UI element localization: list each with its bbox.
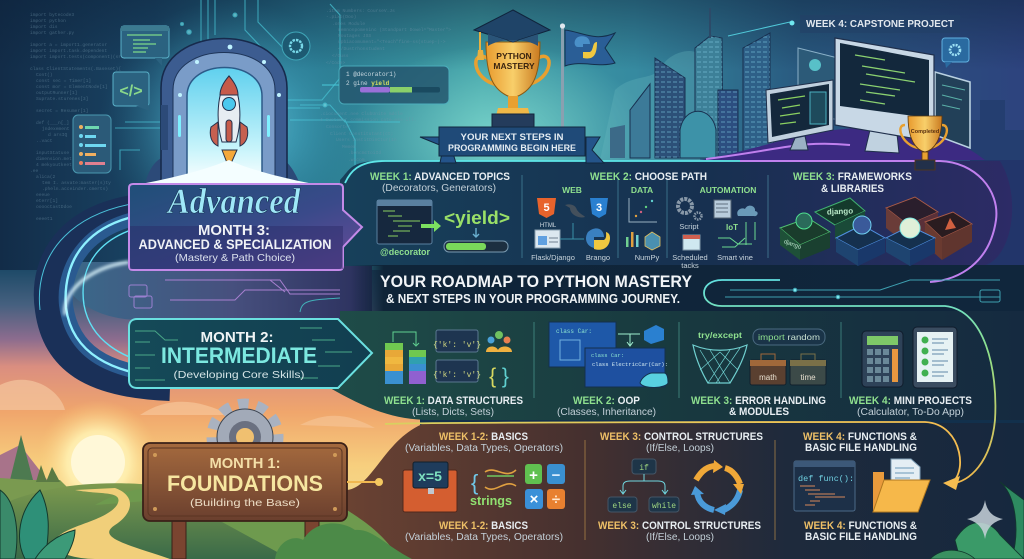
- banner: next steps: [420, 127, 604, 163]
- left code editor background: alica(2: [36, 174, 56, 180]
- section: month 1 week 3: WEEK 3: CONTROL STRUCTURES: [600, 431, 763, 443]
- section: month 3 week 1: @decorator: [380, 247, 430, 257]
- heading: month 1 signpost: (Building the Base): [190, 497, 300, 509]
- icon: braces flow: [471, 470, 516, 495]
- section: month 3 week 2: tacks: [681, 261, 699, 270]
- heading: capstone label: WEEK 4: CAPSTONE PROJECT: [806, 18, 955, 30]
- right code background: memnonpomeninc (Standpart Dowel^"Master">: [338, 27, 451, 33]
- section: month 2 week 4: WEEK 4: MINI PROJECTS: [849, 395, 972, 407]
- right code background: [320, 8, 451, 163]
- icon: green django box: [780, 213, 830, 260]
- icon: trophy and cap: MASTERY: [493, 61, 535, 71]
- left code editor background: jndexement: [42, 126, 70, 132]
- middle area behind tube: [60, 262, 372, 320]
- icon: class diagram: class Car:: [556, 328, 592, 335]
- icon: net: [693, 345, 747, 383]
- heading: month 2 sign: (Developing Core Skills): [174, 369, 304, 381]
- left code editor background: import dis: [30, 24, 58, 30]
- capstone leader line: [728, 20, 794, 36]
- icon: document: [714, 200, 731, 218]
- icon: left monitor: [766, 80, 833, 150]
- icon: trophy and cap: [474, 10, 550, 127]
- background: top tech sky: [0, 0, 1024, 320]
- city skyline: [600, 8, 1024, 160]
- bush: [275, 523, 412, 559]
- section: month 1 week 4: WEEK 4: FUNCTIONS &: [804, 520, 917, 532]
- left code editor background: ooooctastDdoe: [36, 204, 72, 210]
- icon: people: [486, 331, 512, 352]
- icon: if/else flow: while: [652, 502, 676, 511]
- section: month 1 week 3: [598, 431, 763, 543]
- icon: times: ×: [530, 491, 539, 508]
- section: month 1 week 4: [794, 431, 930, 543]
- right code background: </Code>: [326, 60, 346, 66]
- right code background: .wicom: [348, 157, 365, 163]
- panel band: title: [350, 265, 1024, 311]
- icon: code tag bubble: [113, 72, 150, 111]
- title: [380, 272, 693, 306]
- left code editor background: import bytecode3: [30, 12, 74, 18]
- right code background: .item Numbers: CourseV.Js: [326, 8, 395, 14]
- icon: divide: [547, 489, 565, 509]
- icon: code window: [121, 26, 169, 66]
- grass under monitors: [700, 128, 985, 160]
- icon: brown box: [886, 197, 938, 245]
- section: month 3 week 1: [370, 171, 510, 257]
- section: month 2 week 2: (Classes, Inheritance): [557, 407, 656, 418]
- left code editor background: import gather.py: [30, 30, 74, 36]
- purple road: [706, 144, 996, 282]
- background: sunset landscape: [0, 270, 420, 559]
- icon: gear above sign: [213, 405, 277, 469]
- left code editor background: import a = import1.generator: [30, 42, 107, 48]
- icon: if/else flow: [608, 459, 679, 512]
- icon: minus: −: [552, 467, 561, 484]
- section: month 2 week 1: {'k': 'v'}: [433, 341, 481, 350]
- connector line on right: title to month1: [704, 280, 995, 484]
- leaves left: [0, 490, 75, 559]
- left code editor background: def (___n[_]: [36, 120, 69, 126]
- right code background: Noutages JSS: [338, 33, 371, 39]
- section: month 1 week 3: WEEK 3: CONTROL STRUCTURES: [598, 520, 761, 532]
- icon: folder: [873, 459, 930, 512]
- section: month 1 week 1-2: (Variables, Data Types, Operators): [405, 532, 563, 543]
- heading: month 2 sign: [129, 319, 372, 388]
- left code editor background: eeeue: [36, 193, 50, 198]
- icon: html: [537, 198, 556, 218]
- left code editor background: dimension.met: [36, 156, 72, 162]
- icon: loop arrows: [691, 460, 744, 515]
- icon: blue box: [836, 216, 885, 266]
- icon: right monitor: [935, 72, 970, 148]
- icon: to-do tablet: [913, 327, 957, 388]
- icon: browser: [535, 230, 560, 248]
- icon: cloud: [737, 206, 758, 216]
- icon: css: 3: [596, 202, 602, 214]
- left code editor background: eterr[1]: [36, 198, 58, 204]
- left code editor background: class ClientStatements(.Baseset){: [30, 66, 121, 72]
- section: month 3 week 2: NumPy: [635, 253, 660, 262]
- section: month 3 week 2: AUTOMATION: [700, 185, 756, 195]
- icon: minus: [547, 464, 565, 484]
- section: month 1 week 4: BASIC FILE HANDLING: [805, 531, 917, 543]
- left code editor background: ..vact: [36, 138, 53, 144]
- left code editor background: Cont(): [36, 72, 53, 78]
- icon: completed trophy: Completed: [911, 129, 939, 135]
- icon: blue box 2: [886, 218, 935, 266]
- icon: python flag: [560, 23, 615, 127]
- section: month 3 week 2: Brango: [586, 253, 610, 262]
- left code editor background: outputRunner[1]: [36, 90, 77, 96]
- section: month 2 week 1: {'k': 'v'}: [433, 371, 481, 380]
- left code editor background: eeeet1: [36, 216, 53, 222]
- section: month 3 week 3: WEEK 3: FRAMEWORKS: [793, 171, 912, 183]
- heading: capstone label: [800, 15, 960, 33]
- heading: month 2 sign: INTERMEDIATE: [161, 343, 317, 368]
- section: month 2 week 3: WEEK 3: ERROR HANDLING: [691, 395, 826, 407]
- section: month 3 week 2: Smart vine: [717, 253, 753, 262]
- dividers: [522, 175, 841, 540]
- section: month 2 week 3: & MODULES: [729, 406, 789, 418]
- icon: django dark box: [815, 198, 865, 240]
- section: month 2 week 1: (Lists, Dicts, Sets): [412, 407, 494, 418]
- icon: subclass window: class Car:: [591, 352, 624, 359]
- left code editor background: .ee: [30, 169, 39, 174]
- heading: month 3 sign: [129, 181, 362, 270]
- left code editor background: Suprate.sturenes[3]: [36, 96, 88, 102]
- right code background: 4 Customer commission cate.ess-ill.: [320, 117, 416, 123]
- title: & NEXT STEPS IN YOUR PROGRAMMING JOURNEY.: [386, 291, 680, 306]
- left code editor background: .pheln.acceinder.cmerts): [42, 186, 108, 192]
- heading: month 3 sign: MONTH 3:: [198, 222, 270, 239]
- connector: month 1: [347, 478, 383, 486]
- right code background: </Dustrhonstudent: [338, 46, 385, 52]
- section: month 1 week 1-2: [403, 431, 565, 543]
- icon: brown requests box: [925, 212, 972, 260]
- left code editor background: import import.tests(component)(src): [30, 54, 126, 60]
- banner: next steps: YOUR NEXT STEPS IN: [460, 132, 564, 142]
- left code editor background: secret = Resumer[1]: [36, 108, 88, 114]
- panel band: month 3: [340, 161, 1012, 266]
- icon: toolbox x=5: [403, 462, 457, 512]
- circuit traces around portal: [115, 0, 400, 170]
- icon: car: [640, 373, 668, 388]
- icon: numpy cube: [645, 232, 660, 250]
- left code editor background: import python: [30, 18, 66, 24]
- icon: green django box: django: [783, 239, 802, 251]
- icon: if/else flow: if: [639, 464, 649, 473]
- icon: divide: ÷: [552, 491, 560, 508]
- icon: back monitor: [798, 48, 838, 120]
- icon: toolbox time: time: [800, 373, 816, 382]
- icon: function window: def func():: [798, 474, 854, 484]
- icon: cube: [644, 325, 664, 344]
- section: month 2 week 3: try/except: [698, 330, 742, 340]
- icon: rocket portal: [130, 38, 325, 186]
- icon: subclass window: [585, 348, 668, 387]
- panel: code snippet decorator: 2 gine yield: [346, 80, 390, 87]
- icon: bird: [565, 204, 585, 217]
- section: month 3 week 2: DATA: [631, 185, 653, 195]
- portal glow: [100, 0, 360, 250]
- icon: toolbox math: math: [759, 373, 777, 382]
- icon: scatter chart: [629, 198, 657, 222]
- section: month 3 week 2: Scheduled: [672, 253, 708, 262]
- right code background: .bencmctoiId: [348, 150, 381, 156]
- section: month 2 week 4: [849, 327, 972, 418]
- right code background: .ciocument.nee ClubUnite mdcle: [320, 111, 403, 117]
- section: month 3 week 2: HTML: [540, 223, 557, 229]
- icon: if/else flow: else: [612, 502, 632, 511]
- tube road: swirl: [39, 200, 175, 388]
- icon: calendar: [683, 235, 700, 250]
- icon: list card: [73, 115, 111, 173]
- icon: dict boxes: [436, 330, 478, 382]
- section: month 3 week 1: (Decorators, Generators): [382, 183, 496, 194]
- section: month 2 week 2: WEEK 2: OOP: [573, 395, 640, 407]
- icon: plus: +: [529, 467, 538, 484]
- left code editor background: import import.task.dependent: [30, 48, 107, 54]
- banner: next steps: PROGRAMMING BEGIN HERE: [448, 143, 576, 153]
- section: month 3 week 2: [531, 171, 758, 270]
- panel band: month 1: [347, 423, 1024, 559]
- right code background: Users InstitDinCtur(1n: [336, 137, 397, 143]
- icon: circuit: [718, 222, 755, 247]
- icon: code tag bubble: </>: [119, 83, 143, 100]
- icon: gears: [678, 199, 702, 220]
- section: month 3 week 1: <yield>: [444, 208, 510, 228]
- section: month 2 week 1: WEEK 1: DATA STRUCTURES: [384, 395, 523, 407]
- panel: code snippet decorator: [322, 66, 449, 104]
- right code background: upbiacomument="<Teach"fine-ss(stuep-|->: [338, 39, 446, 45]
- left code editor background: 4 mekyoutkeet: [36, 162, 72, 168]
- circuit near title: [725, 280, 1000, 302]
- title: YOUR ROADMAP TO PYTHON MASTERY: [380, 272, 693, 291]
- section: month 3 week 2: WEB: [562, 185, 582, 195]
- cyan top line: [345, 161, 740, 183]
- section: month 3 week 2: Script: [679, 222, 700, 231]
- heading: month 3 sign: Advanced: [166, 181, 301, 221]
- section: month 1 week 1-2: WEEK 1-2: BASICS: [439, 431, 528, 443]
- icon: braces flow: {: [471, 470, 478, 495]
- right code background: </Ouss: [332, 53, 349, 59]
- section: month 1 week 4: BASIC FILE HANDLING: [805, 442, 917, 454]
- icon: html: 5: [543, 202, 550, 214]
- right code background: .ones Module: [332, 21, 365, 27]
- leaves right: [930, 482, 1024, 559]
- icon: python: [586, 228, 610, 250]
- left code editor background: [30, 12, 126, 222]
- panel: code snippet decorator: 1 @decorator1): [346, 71, 396, 78]
- section: month 1 week 3: (If/Else, Loops): [646, 532, 714, 543]
- section: month 2 week 3: [691, 329, 826, 418]
- section: month 1 week 3: (If/Else, Loops): [646, 443, 714, 454]
- icon: main monitor: [835, 38, 934, 153]
- heading: month 1 signpost: MONTH 1:: [210, 455, 280, 472]
- arrow down: [473, 228, 479, 237]
- right code background: -.pixo(Doo): [326, 14, 356, 20]
- section: month 1 week 1-2: WEEK 1-2: BASICS: [439, 520, 528, 532]
- panel band: month 2: [330, 311, 1024, 420]
- left code editor background: const mor = ElementNode[1]: [36, 84, 108, 90]
- icon: stacks: [385, 332, 426, 384]
- heading: month 3 sign: (Mastery & Path Choice): [175, 252, 295, 264]
- section: month 2 week 2: [549, 322, 668, 418]
- left code editor background: inputStatuse: [36, 150, 69, 156]
- heading: month 1 signpost: [143, 443, 347, 559]
- icon: subclass window: class ElectricCar(Car):: [592, 361, 668, 368]
- icon: rocket: [210, 76, 248, 168]
- icon: gear bubble: [942, 38, 969, 68]
- right code background: Client Constitutant(ct;: [330, 131, 393, 137]
- section: month 2 week 1: [384, 330, 523, 418]
- section: month 3 week 2: IoT: [726, 223, 738, 232]
- section: month 3 week 1: WEEK 1: ADVANCED TOPICS: [370, 171, 510, 183]
- icon: completed trophy: [900, 116, 947, 170]
- left code editor background: d arsIQ: [48, 132, 68, 138]
- left code editor background: tem I. asvate:master(s)ty: [42, 180, 111, 186]
- icon: toolbox x=5: x=5: [418, 468, 442, 484]
- heading: month 3 sign: ADVANCED & SPECIALIZATION: [138, 236, 332, 252]
- right code background: Consorter: [326, 124, 351, 130]
- icon: editor: [377, 200, 432, 244]
- icon: settings gear badge: [282, 32, 310, 60]
- icon: calculator: [862, 331, 903, 387]
- section: month 2 week 1: { }: [489, 365, 509, 388]
- icon: project monitors: [766, 38, 970, 170]
- section: month 3 week 3: [780, 171, 972, 266]
- icon: sparkle: [967, 500, 1003, 539]
- section: month 2 week 4: (Calculator, To-Do App): [857, 407, 964, 418]
- heading: month 1 signpost: FOUNDATIONS: [167, 471, 323, 496]
- icon: trophy and cap: PYTHON: [496, 51, 532, 61]
- icon: bars: [626, 232, 638, 247]
- icon: plus: [525, 464, 542, 484]
- arrow head: [943, 476, 960, 490]
- arrow: [421, 220, 441, 232]
- right code background: Memem: [342, 144, 356, 150]
- section: month 1 week 1-2: (Variables, Data Types, Operators): [405, 443, 563, 454]
- bubble: import random: [758, 332, 820, 342]
- section: month 1 week 4: WEEK 4: FUNCTIONS &: [803, 431, 917, 443]
- heading: month 2 sign: MONTH 2:: [200, 329, 274, 346]
- icon: css: [590, 198, 608, 218]
- icon: django dark box: django: [827, 206, 853, 217]
- section: month 3 week 2: WEEK 2: CHOOSE PATH: [590, 171, 707, 183]
- icon: times: [525, 489, 543, 509]
- left code editor background: const sec = Timer[1]: [36, 78, 91, 84]
- section: month 3 week 2: Flask/Django: [531, 253, 575, 262]
- section: month 3 week 3: & LIBRARIES: [821, 183, 884, 195]
- progress bar: [444, 241, 508, 252]
- flow line: [385, 422, 960, 484]
- section: month 1 week 1-2: strings: [470, 493, 512, 508]
